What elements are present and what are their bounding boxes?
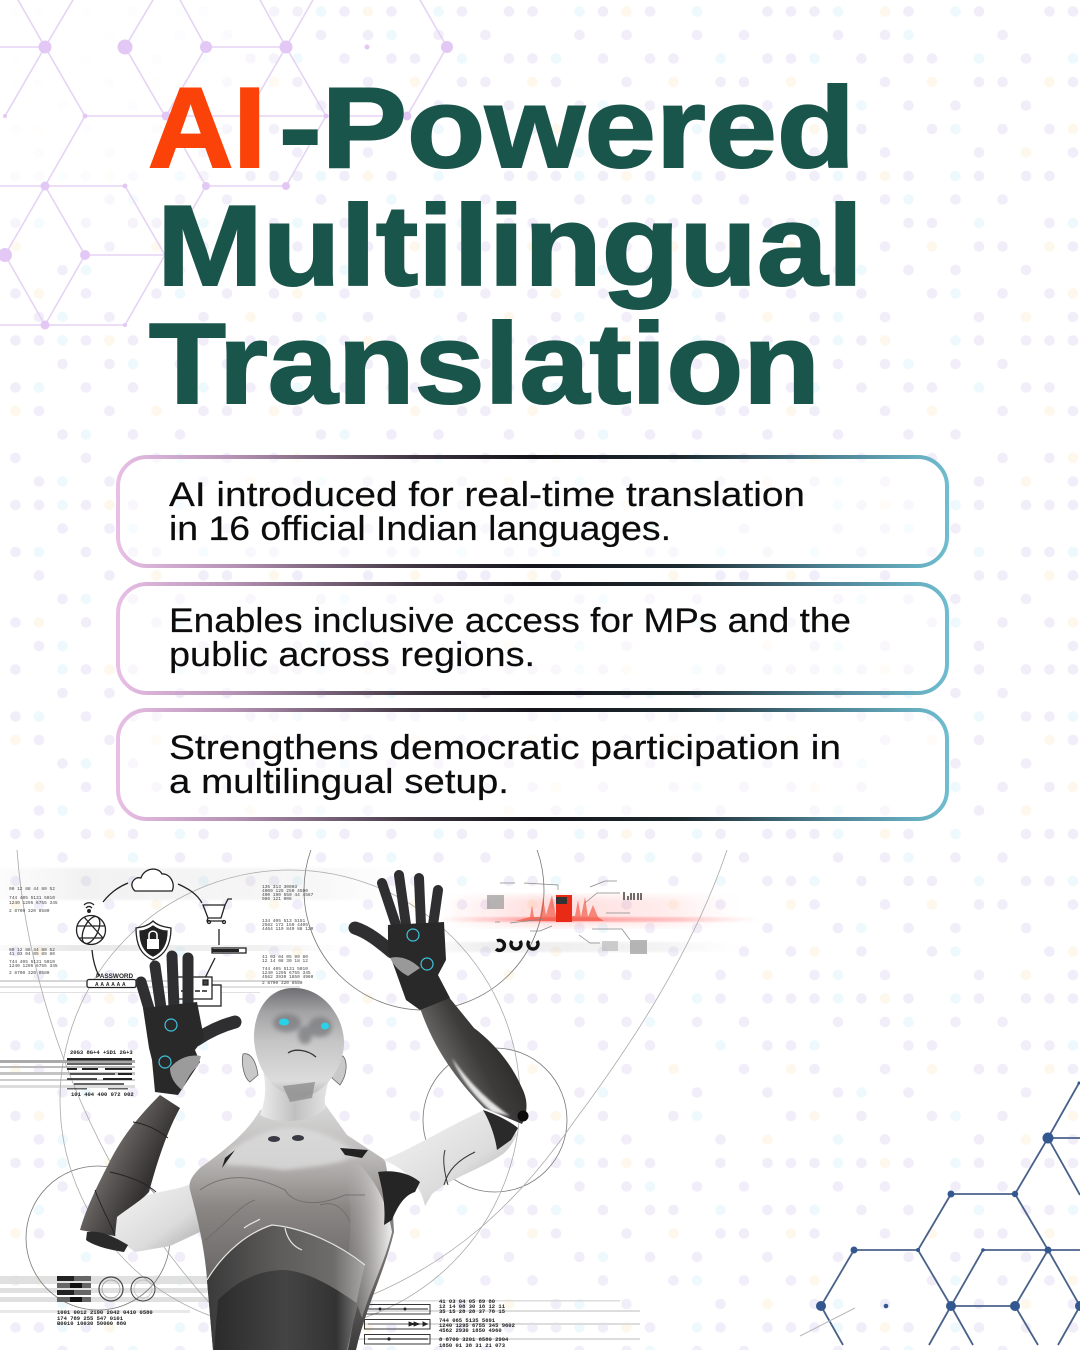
icon: credit cards — [177, 977, 221, 1006]
robot abdomen panel lower — [214, 1270, 358, 1350]
gauge bars and rings — [57, 1276, 155, 1302]
robot hand on shoulder — [378, 1171, 420, 1225]
card: democratic participation — [118, 710, 947, 819]
robot figure — [80, 875, 528, 1350]
robot abdomen panel upper — [207, 1225, 365, 1350]
robot abdomen seams — [207, 1219, 365, 1280]
HUD data text: 2 8700 320 8580 — [262, 980, 303, 986]
left palm — [143, 1002, 204, 1095]
HUD light bands — [0, 868, 760, 1340]
robot eye sockets — [273, 1014, 332, 1044]
hexagon network top left — [0, 0, 453, 330]
red city chart — [487, 881, 647, 954]
HUD data text: 400 190 550 44 4567 — [262, 892, 314, 898]
title word: AI: AI — [148, 65, 266, 192]
robot chest highlight — [348, 1168, 392, 1318]
right palm — [388, 922, 450, 1010]
HUD data text: 1850 01 38 31 21 073 — [439, 1342, 506, 1349]
robot ears — [242, 1054, 346, 1085]
robot left upper arm — [113, 1184, 200, 1252]
card: democratic participation: Strengthens democratic participation in — [169, 729, 841, 767]
HUD data text: 744 405 5131 5010 — [9, 959, 55, 965]
password field: AAAAAA — [95, 982, 127, 988]
HUD data text: 1240 1295 6755 345 — [9, 963, 58, 969]
robot right hand — [355, 875, 450, 1010]
black ring glyphs — [496, 940, 538, 950]
password field: PASSWORD — [96, 973, 134, 980]
right wrist highlight — [390, 957, 420, 976]
HUD data text: 101 404 400 072 002 — [71, 1091, 134, 1098]
HUD data text: 744 065 5135 5691 — [439, 1317, 496, 1324]
HUD data text: 00 12 88 44 80 52 — [9, 947, 55, 953]
HUD data text: 1240 1295 6755 345 9602 — [439, 1322, 515, 1329]
slider boxes — [364, 1304, 430, 1344]
left palm sensors — [159, 1019, 177, 1068]
icon group: cloud, globe, shield, cart, card — [76, 869, 246, 1006]
card: real-time translation: in 16 official Indian languages. — [169, 510, 671, 548]
HUD data text: 086 121 006 — [262, 896, 292, 902]
hexagon network bottom right — [800, 1082, 1080, 1345]
HUD data text: 1240 1295 6755 345 — [262, 970, 311, 976]
robot head — [242, 988, 346, 1102]
robot right upper arm — [383, 1110, 517, 1206]
password field — [87, 973, 136, 988]
HUD data text: 744 405 5131 5010 — [262, 966, 308, 972]
right fingers — [355, 875, 438, 952]
robot collar and shoulders highlight — [225, 1128, 360, 1170]
icon: shield with lock — [136, 921, 171, 960]
card: real-time translation — [118, 457, 947, 566]
HUD data text: 00 12 88 44 80 52 — [9, 886, 55, 892]
HUD data text: 8 8700 3201 8580 2904 — [439, 1336, 509, 1343]
robot right forearm — [420, 996, 526, 1124]
robot neck — [260, 1072, 328, 1121]
card: real-time translation: AI introduced for real-time translation — [169, 476, 805, 514]
HUD data text: 2 8700 320 8580 — [9, 970, 50, 976]
HUD data text: 4562 3930 1850 4960 — [262, 974, 314, 980]
icon: connecting ring — [92, 883, 219, 980]
robot collar details — [222, 1135, 368, 1168]
icon: progress bar — [212, 948, 246, 953]
robot right elbow joint — [483, 1110, 528, 1150]
robot right upper arm seams — [444, 1150, 475, 1185]
HUD data text — [9, 884, 515, 1349]
robot torso — [189, 1103, 394, 1350]
HUD data text: 4562 2930 1850 4960 — [439, 1327, 502, 1334]
robot skull and face — [254, 988, 344, 1097]
icon: cloud — [132, 869, 173, 891]
HUD data text: 174 789 255 547 0101 — [57, 1315, 124, 1322]
robot left hand — [141, 956, 235, 1095]
HUD data text: 41 03 04 05 89 80 — [439, 1298, 495, 1305]
HUD data text: 1001 0012 2100 2042 0410 0580 — [57, 1309, 153, 1316]
HUD data text: 1240 1295 6755 345 — [9, 900, 58, 906]
HUD data text: 35 15 28 28 37 78 15 — [439, 1308, 506, 1315]
card: inclusive access: Enables inclusive access for MPs and the — [169, 602, 851, 640]
robot right forearm highlight — [452, 1058, 510, 1116]
HUD data text: 135 313 30003 — [262, 884, 297, 890]
HUD data text: 134 405 513 5151 — [262, 918, 306, 924]
HUD data text: 12 14 08 30 18 12 — [262, 958, 308, 964]
HUD data text: B0010 10030 50000 880 — [57, 1320, 126, 1327]
left wrist highlight — [170, 1056, 201, 1090]
card: democratic participation: a multilingual setup. — [169, 763, 509, 801]
title line: Multilingual: Multilingual — [157, 183, 863, 310]
robot left forearm seams — [95, 1122, 168, 1236]
illustration: robot and holographic interface — [0, 850, 744, 1350]
HUD data text: 41 03 04 05 89 80 — [9, 951, 55, 957]
HUD data text: 4009 125 250 4500 — [262, 888, 308, 894]
title line: Translation: Translation — [149, 301, 820, 428]
card: inclusive access: public across regions. — [169, 636, 535, 674]
HUD data text: 4464 119 840 88 120 — [262, 926, 314, 932]
thin orbit circles — [16, 850, 728, 1318]
icon: shopping cart — [203, 899, 232, 924]
left fingers — [141, 956, 235, 1040]
icon: globe — [76, 903, 106, 946]
robot mouth — [288, 1050, 316, 1057]
dark data table — [67, 1058, 132, 1090]
HUD data text: 20G3 8G+4 +SD1 2G+3 — [70, 1049, 133, 1056]
robot left elbow joint — [86, 1232, 128, 1252]
HUD data text: 744 405 5131 5010 — [9, 895, 55, 901]
robot eyes — [279, 1018, 329, 1030]
card: inclusive access — [118, 584, 947, 693]
title — [148, 65, 863, 428]
title word: -Powered: -Powered — [279, 65, 855, 192]
robot left forearm — [80, 1095, 180, 1236]
HUD data text: 41 03 04 05 89 80 — [262, 954, 308, 960]
right palm sensors — [407, 929, 433, 970]
HUD data text: 12 14 08 30 18 12 11 — [439, 1303, 506, 1310]
robot throat mechanism — [283, 1082, 315, 1102]
HUD data text: 2562 172 150 4405 — [262, 922, 308, 928]
HUD data text: 2 8700 320 8580 — [9, 908, 50, 914]
robot chest seams — [200, 1178, 365, 1240]
